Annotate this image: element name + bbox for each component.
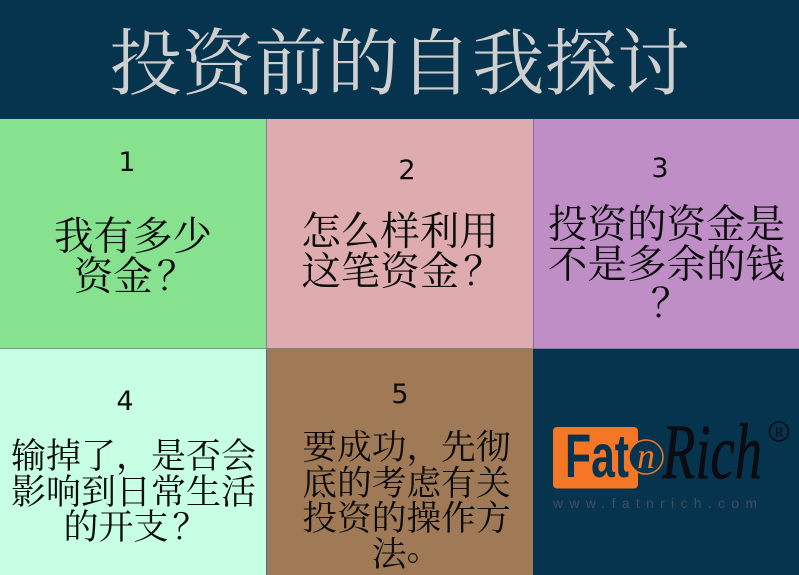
question 1 text: 资金？ <box>74 246 196 302</box>
logo url: www.fatnrich.com <box>552 495 757 511</box>
icon: FatnRich logo <box>552 408 790 511</box>
question 2 text: 怎么样利用 <box>301 201 499 257</box>
number 1: 1 <box>118 147 136 178</box>
question 2 text <box>301 201 503 296</box>
logo circle n <box>629 436 663 476</box>
panel: question 1 <box>0 119 267 349</box>
number 4: 4 <box>116 386 134 417</box>
registered mark: R <box>774 426 784 440</box>
title: 投资前的自我探讨 <box>110 6 690 110</box>
question 2 text: 这笔资金？ <box>301 240 503 296</box>
question 3 text: 投资的资金是 <box>548 194 785 250</box>
logo circle n: n <box>637 436 655 476</box>
logo word Fat: Fat <box>565 422 629 490</box>
question 1 text: 我有多少 <box>54 206 212 262</box>
title banner <box>0 0 799 119</box>
panel: question 3 <box>534 119 799 349</box>
question 5 text: 要成功，先彻 <box>302 419 511 469</box>
question 4 text <box>11 429 256 550</box>
question 3 text: ？ <box>651 273 690 329</box>
number 5: 5 <box>391 379 409 410</box>
panel: question 2 <box>267 119 534 349</box>
question 1 text <box>54 206 212 302</box>
panel: question 4 <box>0 349 267 575</box>
number 2: 2 <box>398 155 416 186</box>
question 4 text: 输掉了，是否会 <box>11 429 256 479</box>
question 4 text: 的开支？ <box>63 500 208 550</box>
logo orange badge <box>553 427 638 488</box>
question 3 text <box>548 194 785 329</box>
panel: question 5 <box>267 349 533 575</box>
question 5 text <box>302 419 511 575</box>
question 5 text: 法。 <box>372 520 441 575</box>
number 3: 3 <box>651 153 669 184</box>
question 4 text: 影响到日常生活 <box>11 464 256 514</box>
question 3 text: 不是多余的钱 <box>548 234 785 290</box>
question 5 text: 底的考虑有关 <box>302 454 511 504</box>
question 5 text: 投资的操作方 <box>302 490 511 540</box>
panel: logo <box>533 349 799 575</box>
registered mark <box>770 422 788 441</box>
